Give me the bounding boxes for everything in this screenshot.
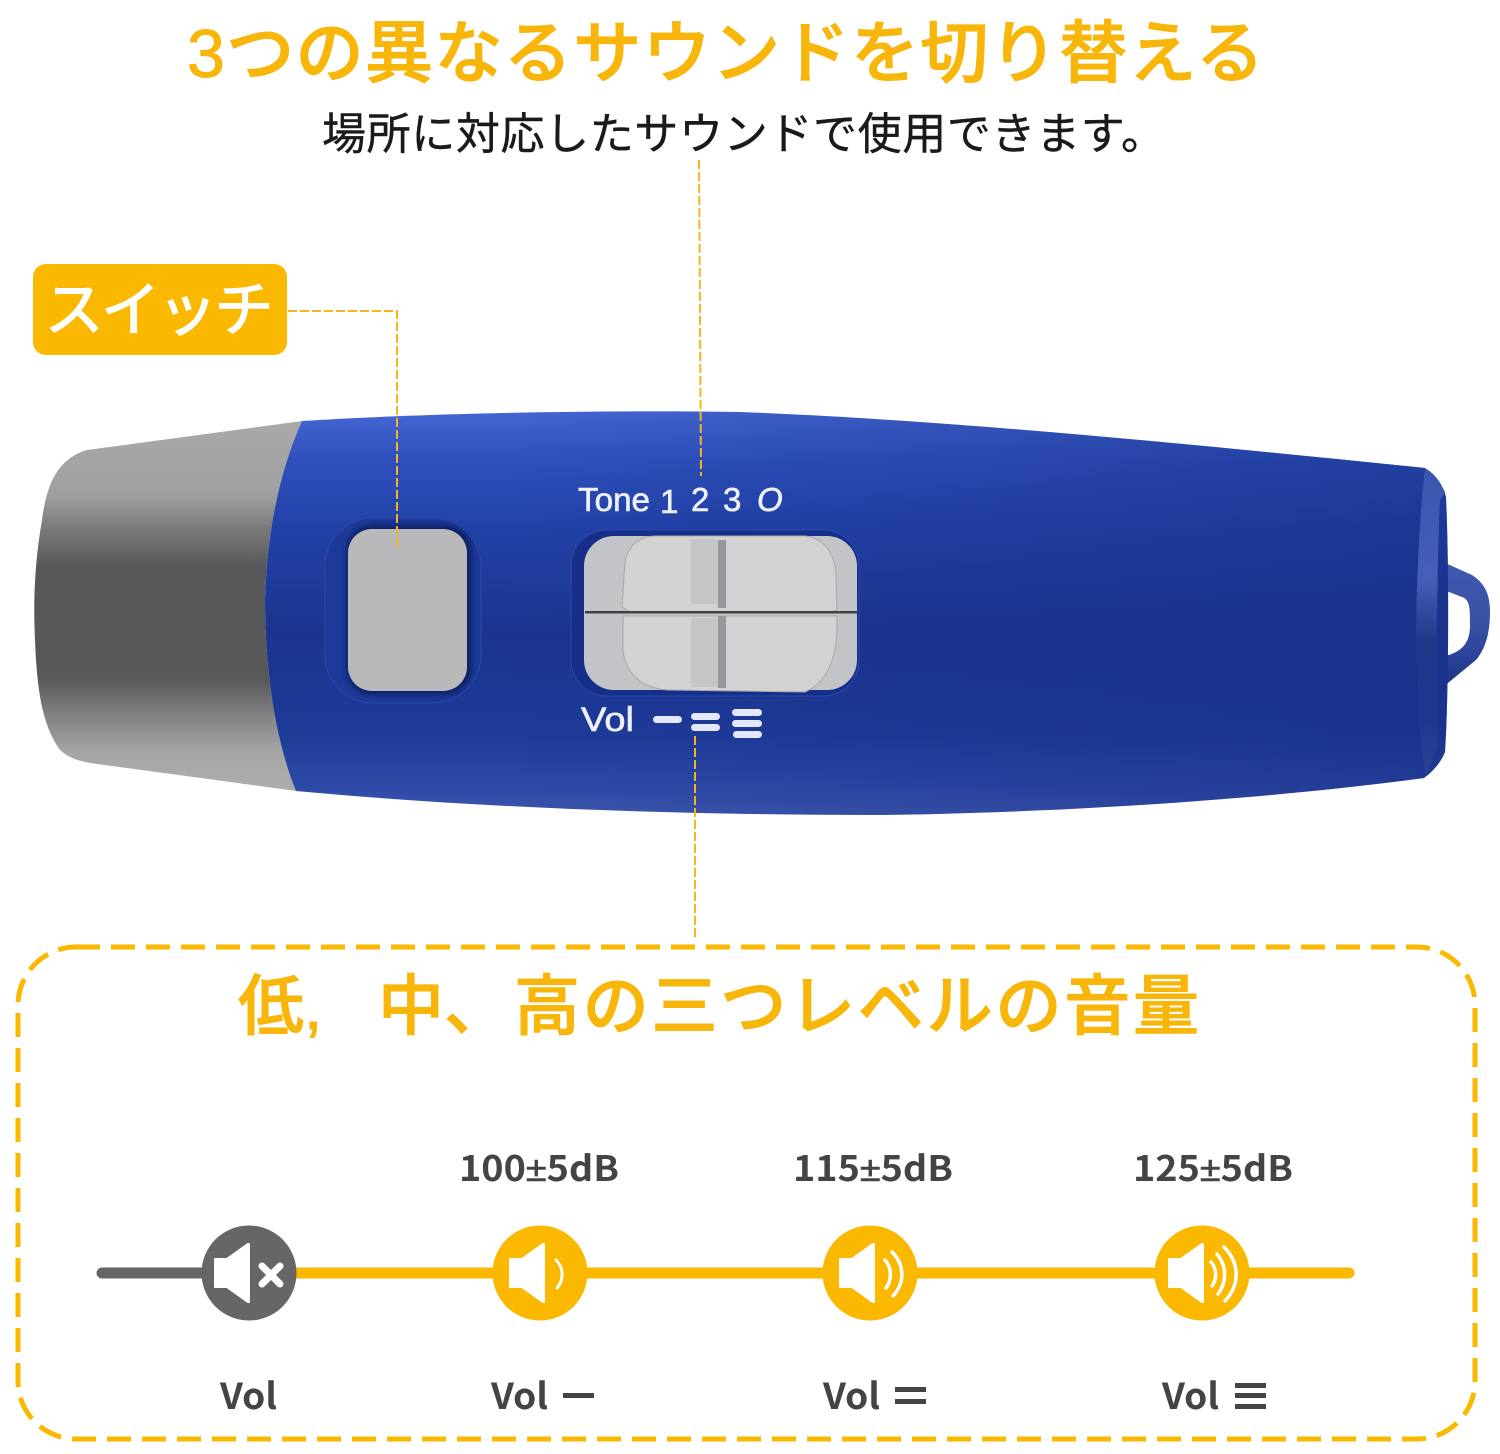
switch label: スイッチ — [44, 277, 274, 344]
dashed panel border — [18, 947, 1475, 1439]
tone labels: 3 — [723, 481, 741, 518]
volume panel — [18, 947, 1475, 1439]
tone labels — [578, 481, 783, 520]
volume level labels: Vol — [490, 1368, 548, 1420]
tone labels: 1 — [660, 483, 678, 520]
panel heading: 中、 — [378, 969, 510, 1043]
callout line: tone — [699, 160, 701, 476]
whistle lanyard loop — [1443, 562, 1490, 687]
whistle mouthpiece — [34, 421, 302, 791]
icon: speaker high — [1154, 1226, 1250, 1320]
volume level labels: Vol — [1161, 1368, 1219, 1420]
volume track — [102, 1268, 1349, 1278]
panel heading: 高の三つレベルの音量 — [514, 969, 1199, 1043]
volume labels: Vol — [581, 701, 634, 739]
tone and volume slider — [571, 530, 859, 696]
decibel labels — [459, 1141, 1293, 1192]
callout line: switch — [288, 311, 397, 550]
decibel labels: 125±5dB — [1133, 1141, 1293, 1192]
decibel labels: 115±5dB — [793, 1141, 953, 1192]
title: 3つの異なるサウンドを切り替える — [187, 16, 1264, 92]
panel heading: 低, — [238, 969, 322, 1043]
tone labels: 2 — [691, 481, 709, 518]
callout line: volume — [694, 736, 696, 940]
icon: speaker medium — [822, 1226, 918, 1320]
tone labels: Tone — [578, 481, 650, 518]
whistle illustration — [34, 411, 1490, 815]
tone labels: O — [757, 481, 783, 518]
icon: muted speaker — [202, 1226, 296, 1320]
volume level labels — [219, 1368, 1266, 1420]
whistle body — [265, 411, 1448, 815]
volume labels — [581, 701, 762, 739]
icon: speaker low — [492, 1226, 588, 1320]
volume level labels: Vol — [822, 1368, 880, 1420]
switch label — [33, 264, 287, 355]
subtitle: 場所に対応したサウンドで使用できます。 — [322, 110, 1165, 159]
switch button — [325, 518, 481, 703]
volume level labels: Vol — [219, 1368, 277, 1420]
decibel labels: 100±5dB — [459, 1141, 619, 1192]
